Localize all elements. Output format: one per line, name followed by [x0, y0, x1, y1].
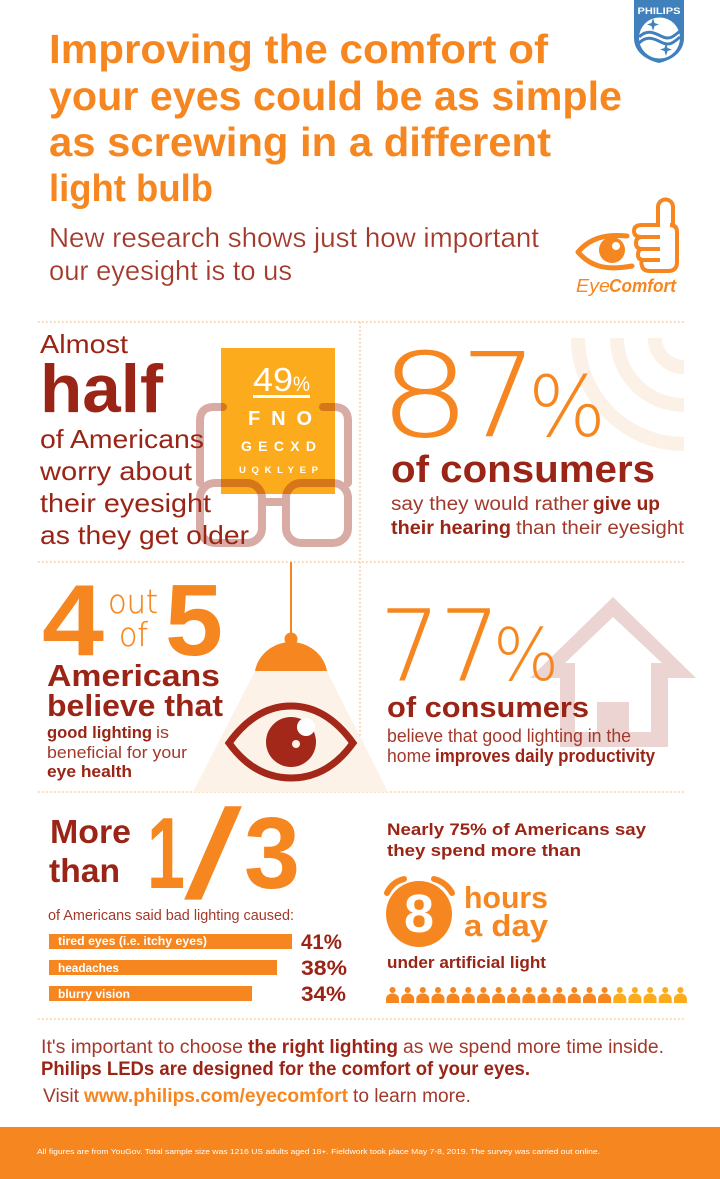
icon: house	[530, 597, 696, 747]
stat: 87%: %	[528, 358, 606, 456]
subtitle	[49, 222, 539, 286]
text: Americans believe that	[47, 658, 223, 781]
text: nearly 75%	[387, 820, 647, 860]
text: of consumers: home	[387, 746, 431, 766]
title: as screwing in a different	[49, 119, 551, 165]
logo: Philips shield: PHILIPS	[638, 6, 680, 16]
text: hours a day: a day	[464, 908, 549, 943]
footer band with source note	[0, 1127, 720, 1179]
text: Americans believe that: Americans	[47, 658, 220, 693]
text: almost half of Americans: worry about	[39, 456, 193, 486]
eye chart: GECXD	[241, 438, 316, 454]
text: almost half of Americans: Almost	[40, 329, 129, 359]
text: Americans believe that: good lighting	[47, 723, 152, 742]
icon: alarm clock: 8	[404, 884, 434, 944]
title	[49, 26, 622, 210]
text: Americans believe that: is	[156, 723, 169, 742]
heading: more than: More	[50, 813, 131, 850]
stat: 87%: 8	[379, 329, 471, 464]
eye chart: FNO	[248, 408, 312, 430]
text: Americans believe that: beneficial for your	[47, 743, 187, 762]
bar chart: tired eyes (i.e. itchy eyes)	[58, 934, 207, 948]
bar chart: blurry vision	[58, 987, 130, 1001]
icon: EyeComfort eye and thumbs up	[576, 200, 677, 296]
text: almost half of Americans: their eyesight	[40, 488, 212, 518]
text: of Americans said: of Americans said bad lighting caused:	[48, 907, 294, 924]
closing text block	[41, 1037, 664, 1107]
text: almost half of Americans	[39, 329, 249, 550]
icon: EyeComfort eye and thumbs up: Comfort	[609, 276, 677, 296]
title: Improving the comfort of	[49, 26, 548, 72]
icon: sound waves	[578, 338, 684, 444]
bar chart	[49, 931, 347, 1006]
text: of consumers	[391, 449, 685, 539]
icon: lamp with light cone and eye	[193, 562, 388, 792]
panel: 87 percent of consumers	[379, 329, 685, 539]
text: almost half of Americans: of Americans	[40, 424, 204, 454]
stat: 77%: %	[493, 613, 559, 697]
closing text block: to learn more.	[353, 1086, 471, 1107]
bar chart: 41%	[301, 931, 342, 954]
stat: 4 out of 5: of	[119, 615, 148, 654]
stat: 1/3	[147, 784, 300, 925]
heading: more than	[49, 813, 131, 889]
closing text block: Philips LEDs are designed for the comfort of your eyes.	[41, 1059, 530, 1080]
text: Americans believe that: believe that	[47, 688, 223, 723]
text: hours a day	[387, 880, 549, 972]
panel: eight hours a day	[386, 820, 687, 1003]
stat: 1/3: 1	[147, 798, 185, 910]
stat: 1/3: 3	[244, 798, 300, 910]
bar chart: 38%	[301, 957, 347, 980]
text: nearly 75%: Nearly 75% of Americans say	[387, 820, 647, 839]
text: Americans believe that: eye health	[47, 762, 132, 781]
text: of consumers: believe that good lighting in the	[387, 726, 631, 746]
closing text block: Visit	[43, 1086, 80, 1107]
text: of consumers: than their eyesight	[516, 518, 685, 539]
text: of consumers: give up	[593, 494, 660, 515]
text: almost half of Americans: half	[40, 351, 163, 427]
text: of consumers: their hearing	[391, 518, 511, 539]
stat: 87%	[379, 329, 606, 464]
eye chart: UQKLYEP	[239, 465, 319, 476]
stat: 87%: 7	[461, 329, 537, 464]
title: your eyes could be as simple	[49, 73, 622, 119]
text: hours a day: hours	[464, 880, 548, 915]
text: almost half of Americans: as they get older	[40, 520, 249, 550]
text: nearly 75%: they spend more than	[387, 841, 581, 860]
pictogram: people	[386, 987, 687, 1003]
text: of consumers: of consumers	[387, 692, 589, 724]
closing text block: as we spend more time inside.	[403, 1037, 664, 1058]
eye chart	[221, 348, 335, 494]
stat: 77%: 77	[380, 590, 500, 704]
stat: 4 out of 5: out	[108, 582, 158, 621]
closing text block: www.philips.com/eyecomfort	[83, 1086, 349, 1107]
icon: alarm clock	[386, 879, 452, 947]
text: of consumers	[387, 692, 655, 766]
title: light bulb	[49, 168, 213, 210]
bar chart: 34%	[301, 983, 346, 1006]
panel: 77 percent of consumers	[380, 590, 696, 766]
bar chart: headaches	[58, 961, 119, 975]
stat: 1/3: /	[185, 784, 241, 925]
footer band with source note: All figures are from YouGov. Total sample size was 1216 US adults aged 18+. Fieldwork took place May 7-8, 2019. The survey was carried out online.	[37, 1147, 600, 1156]
eye chart: %	[293, 373, 310, 396]
closing text block: the right lighting	[248, 1037, 398, 1058]
stat: 4 out of 5	[42, 565, 223, 677]
panel: almost half worry about eyesight	[39, 329, 348, 550]
heading: more than: than	[49, 852, 120, 889]
subtitle: our eyesight is to us	[49, 255, 292, 286]
closing text block: It's important to choose	[41, 1037, 243, 1058]
stat: 77%	[380, 590, 559, 704]
text: of consumers: of consumers	[391, 449, 655, 491]
eye chart: 49	[253, 361, 293, 398]
text: of consumers: say they would rather	[391, 494, 590, 515]
text: hours a day: under artificial light	[387, 953, 546, 972]
icon: glasses	[200, 407, 348, 543]
icon: EyeComfort eye and thumbs up: Eye	[576, 276, 610, 296]
panel: more than one third	[48, 784, 347, 1006]
stat: 4 out of 5: 5	[165, 565, 223, 677]
text: of consumers: improves daily productivity	[435, 746, 655, 766]
stat: 4 out of 5: 4	[42, 565, 104, 677]
subtitle: New research shows just how important	[49, 222, 539, 253]
panel: 4 out of 5 Americans	[42, 562, 388, 792]
logo: Philips shield	[634, 0, 684, 63]
